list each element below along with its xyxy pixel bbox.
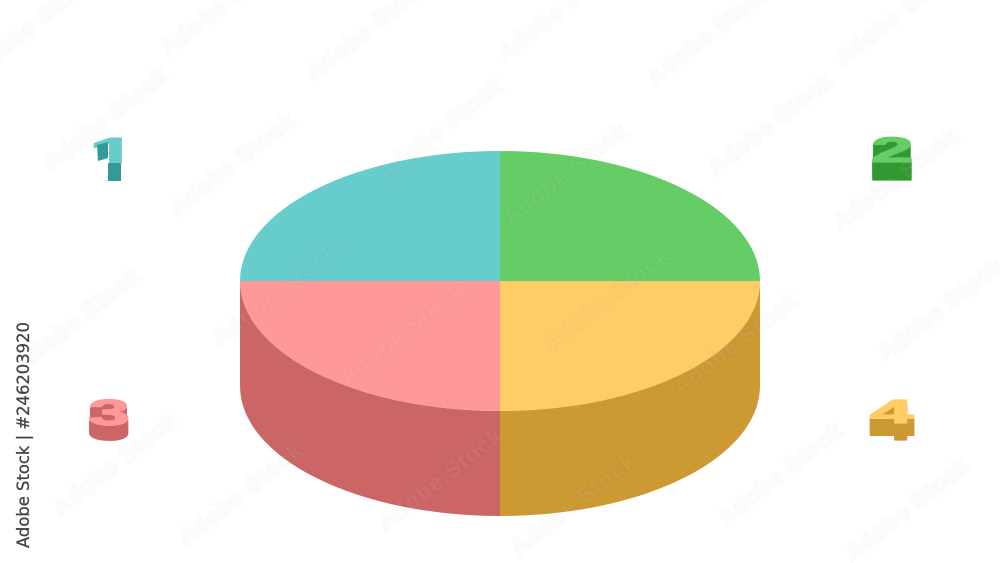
watermark pattern: Adobe Stock (372, 72, 508, 186)
number 3: 3 (88, 408, 130, 448)
watermark pattern: Adobe Stock (372, 422, 508, 536)
watermark pattern: Adobe Stock (172, 437, 308, 551)
number 4: 4 (870, 402, 914, 439)
number 4: 4 (870, 404, 914, 441)
side: red segment wall (240, 281, 500, 516)
watermark pattern: Adobe Stock (334, 277, 470, 391)
watermark pattern: Adobe Stock (667, 287, 803, 401)
watermark pattern: Adobe Stock (702, 67, 838, 181)
number 3: 3 (88, 393, 130, 433)
number 2: 2 (871, 142, 913, 182)
top slice 1: teal (240, 151, 500, 281)
watermark pattern: Adobe Stock (47, 407, 183, 521)
infographic canvas (16, 136, 914, 548)
number 4: 4 (870, 408, 914, 445)
number 3: 3 (88, 402, 130, 442)
number 2: 2 (871, 148, 913, 188)
number 2: 2 (871, 146, 913, 186)
number 2: 2 (871, 134, 913, 174)
number 1 (94, 138, 122, 181)
number 4: 4 (870, 410, 914, 447)
number 3: 3 (88, 400, 130, 440)
watermark pattern: Adobe Stock (712, 417, 848, 531)
top slice 3: pink (240, 281, 500, 411)
number 4: 4 (870, 396, 914, 433)
number 4: 4 (870, 400, 914, 437)
number 2: 2 (871, 144, 913, 184)
number 4: 4 (870, 406, 914, 443)
watermark pattern: Adobe Stock (37, 62, 173, 176)
number 4: 4 (870, 398, 914, 435)
watermark pattern: Adobe Stock (497, 117, 633, 231)
number 3: 3 (88, 406, 130, 446)
stock id label: Adobe Stock | #246203920 (14, 322, 33, 548)
number 4: 4 (870, 393, 914, 430)
number 2: 2 (871, 130, 913, 170)
number 3: 3 (88, 398, 130, 438)
watermark pattern: Adobe Stock (539, 242, 675, 356)
number 1: 1 (87, 126, 139, 183)
number 4 (870, 393, 914, 447)
watermark pattern: Adobe Stock (505, 447, 641, 561)
watermark pattern: Adobe Stock (207, 237, 343, 351)
3D pie chart (240, 151, 760, 516)
number 2: 2 (871, 132, 913, 172)
number 2: 2 (871, 138, 913, 178)
watermark pattern: Adobe Stock (827, 122, 963, 236)
top slice 4: yellow (500, 281, 760, 411)
number 2: 2 (871, 140, 913, 180)
number 2: 2 (871, 136, 913, 176)
top slice 2: green (500, 151, 760, 281)
number 2 (871, 130, 913, 188)
side: gold segment wall (500, 281, 760, 516)
watermark pattern: Adobe Stock (9, 262, 145, 376)
watermark pattern: Adobe Stock (839, 452, 975, 563)
number 3: 3 (88, 404, 130, 444)
watermark pattern: Adobe Stock (164, 107, 300, 221)
number 3: 3 (88, 396, 130, 436)
